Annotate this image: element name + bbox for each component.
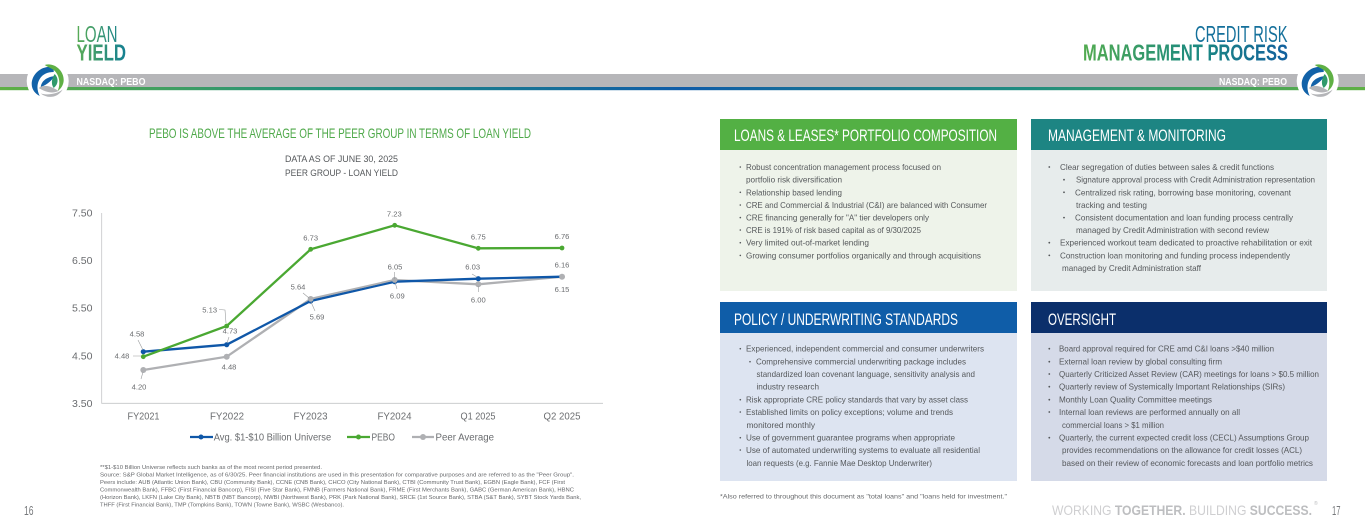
panel heading: OVERSIGHT — [1048, 310, 1116, 329]
footnote: sources and peers: Commonwealth Bank), FFBC (First Financial Bancorp), FISI (Five Star Bank), FMNB (Farmers National Bank), FRME (First Merchants Bank), GABC (German American Bank), HBNC — [100, 488, 574, 494]
data labels: 5.13 — [202, 306, 217, 315]
panel heading: POLICY / UNDERWRITING STANDARDS — [734, 310, 958, 329]
icon: logo right — [1297, 60, 1339, 102]
x axis labels: Q2 2025 — [544, 410, 581, 422]
title: loan yield — [76, 21, 126, 66]
panel heading — [1031, 119, 1327, 150]
chart subheading — [285, 154, 398, 178]
bullet list: Experienced, independent commercial and consumer underwriters — [746, 345, 984, 354]
legend: Avg. $1-$10 Billion Universe — [214, 433, 332, 444]
data labels: 7.23 — [387, 209, 402, 218]
title: loan yield: LOAN — [76, 21, 118, 47]
bullet list: provides recommendations on the allowance for credit losses (ACL) — [1062, 446, 1302, 455]
x axis labels: FY2022 — [210, 410, 244, 422]
data labels — [115, 209, 569, 392]
panel heading — [720, 302, 1017, 333]
footnote: sources and peers: (Horizon Bank), LKFN (Lake City Bank), NBTB (NBT Bancorp), NWBI (Northwest Bank), PRK (Park National Bank), SRCE (1st Source Bank), STBA (S&T Bank), SYBT Stock Yards Bank, — [100, 495, 581, 501]
legend: Peer Average — [436, 433, 494, 444]
bullet list: CRE is 191% of risk based capital as of 9/30/2025 — [746, 226, 921, 235]
bullet list: Board approval required for CRE amd C&I loans >$40 million — [1059, 345, 1274, 354]
bullet list: Construction loan monitoring and funding process independently — [1060, 251, 1291, 260]
bullet list: Growing consumer portfolios organically and through acquisitions — [746, 251, 981, 260]
registered mark: ® — [1314, 500, 1318, 507]
bullet list — [1048, 163, 1315, 273]
series: peer average — [140, 274, 565, 373]
x axis labels: Q1 2025 — [460, 410, 496, 422]
panel: policy and underwriting standards — [720, 302, 1017, 481]
bullet list: loan requests (e.g. Fannie Mae Desktop Underwriter) — [746, 459, 932, 468]
bullet list: Clear segregation of duties between sales & credit functions — [1060, 163, 1274, 172]
bullet list: commercial loans > $1 million — [1062, 421, 1164, 430]
bullet list — [1048, 345, 1319, 468]
bullet list — [740, 163, 987, 260]
bullet list: managed by Credit Administration with second review — [1076, 226, 1269, 235]
data labels: 4.20 — [132, 383, 146, 392]
data labels: 6.73 — [303, 233, 318, 242]
data labels: 6.75 — [471, 232, 486, 241]
chart subheading: PEER GROUP - LOAN YIELD — [285, 168, 398, 178]
panel heading — [720, 119, 1017, 150]
data labels: 6.09 — [390, 292, 405, 301]
x axis labels: FY2024 — [378, 410, 412, 422]
title: credit risk management process — [1083, 21, 1288, 66]
bullet list: Consistent documentation and loan funding process centrally — [1075, 214, 1294, 223]
title: credit risk management process: CREDIT RISK — [1195, 21, 1288, 47]
ticker label left: NASDAQ: PEBO — [76, 76, 146, 88]
panel heading: LOANS & LEASES* PORTFOLIO COMPOSITION — [734, 126, 997, 145]
header band — [0, 74, 1365, 90]
ticker label right: NASDAQ: PEBO — [1219, 76, 1287, 88]
bullet list: managed by Credit Administration staff — [1062, 264, 1202, 273]
bullet list: Centralized risk rating, borrowing base monitoring, covenant — [1075, 188, 1292, 197]
y axis labels: 4.50 — [72, 350, 93, 362]
bullet list: based on their review of economic forecasts and loan portfolio metrics — [1062, 459, 1313, 468]
legend: PEBO — [372, 433, 395, 444]
panel: oversight — [1031, 302, 1327, 481]
bullet list: Relationship based lending — [746, 188, 842, 197]
footnote: total loans: *Also referred to throughout this document as "total loans" and "loans held for investment." — [720, 494, 1007, 500]
bullet list: Internal loan reviews are performed annually on all — [1059, 408, 1240, 417]
series: avg $1-$10 billion universe — [141, 276, 562, 354]
bullet list: monitored monthly — [746, 421, 816, 430]
y axis labels: 6.50 — [72, 255, 93, 267]
x axis labels: FY2023 — [294, 410, 328, 422]
bullet list: Very limited out-of-market lending — [746, 239, 869, 248]
icon: logo left — [27, 60, 69, 102]
bullet list: portfolio risk diversification — [746, 176, 842, 185]
bullet list: CRE financing generally for "A" tier developers only — [746, 214, 930, 223]
data labels: 6.00 — [471, 295, 486, 304]
footnote: sources and peers: Source: S&P Global Market Intelligence, as of 6/30/25. Peer financial institutions are used in this presentation for comparative purposes and are referred to as the "Peer Group". — [100, 472, 574, 478]
leader lines — [133, 272, 478, 379]
y axis labels: 3.50 — [72, 398, 93, 410]
bullet list: Quarterly, the current expected credit loss (CECL) Assumptions Group — [1059, 434, 1309, 443]
bullet list: Signature approval process with Credit Administration representation — [1076, 176, 1315, 185]
bullet list: Use of government guarantee programs when appropriate — [746, 434, 955, 443]
bullet list: Comprehensive commercial underwriting package includes — [756, 358, 966, 367]
data labels: 6.03 — [465, 263, 480, 272]
data labels: 4.58 — [130, 330, 144, 339]
tagline: WORKING TOGETHER. BUILDING SUCCESS. — [1052, 502, 1312, 518]
bullet list: Quarterly review of Systemically Important Relationships (SIRs) — [1059, 383, 1285, 392]
bullet list: industry research — [756, 383, 819, 392]
x axis labels: FY2021 — [128, 410, 160, 422]
bullet list: CRE and Commercial & Industrial (C&I) are balanced with Consumer — [746, 201, 987, 210]
data labels: 6.15 — [555, 285, 569, 294]
bullet list: Quarterly Criticized Asset Review (CAR) meetings for loans > $0.5 million — [1059, 370, 1319, 379]
data labels: 4.48 — [115, 352, 129, 361]
bullet list: standardized loan covenant language, sensitivity analysis and — [756, 370, 975, 379]
line chart: loan yield — [72, 208, 603, 444]
y axis labels — [72, 208, 93, 410]
bullet list: Use of automated underwriting systems to evaluate all residential — [746, 446, 980, 455]
page number 17: 17 — [1332, 504, 1341, 518]
data labels: 4.48 — [222, 362, 236, 371]
panel: management and monitoring — [1031, 119, 1327, 291]
data labels: 6.76 — [555, 232, 569, 241]
title: loan yield: YIELD — [76, 40, 126, 66]
bullet list: Risk appropriate CRE policy standards that vary by asset class — [746, 396, 968, 405]
y axis labels: 7.50 — [72, 208, 93, 220]
footnote: sources and peers — [100, 465, 581, 508]
data labels: 5.64 — [291, 283, 305, 292]
bullet list — [740, 345, 984, 468]
footnote: sources and peers: Peers include: AUB (Atlantic Union Bank), CBU (Community Bank), CCNE (CNB Bank), CHCO (City National Bank), CTBI (Community Trust Bank), EGBN (Eagle Bank), FCF (First — [100, 480, 565, 486]
footnote: sources and peers: **$1-$10 Billion Universe reflects such banks as of the most recent period presented. — [100, 465, 322, 471]
bullet list: Monthly Loan Quality Committee meetings — [1059, 396, 1212, 405]
bullet list: tracking and testing — [1076, 201, 1147, 210]
data labels: 6.05 — [388, 263, 402, 272]
panel heading — [1031, 302, 1327, 333]
bullet list: Experienced workout team dedicated to proactive rehabilitation or exit — [1060, 239, 1313, 248]
x axis labels — [128, 410, 581, 422]
series: peer average overlap — [308, 274, 565, 302]
data labels: 6.16 — [555, 261, 569, 270]
chart subheading: DATA AS OF JUNE 30, 2025 — [285, 154, 398, 164]
panel heading: MANAGEMENT & MONITORING — [1048, 126, 1226, 145]
data labels: 5.69 — [310, 313, 324, 322]
chart heading: PEBO IS ABOVE THE AVERAGE OF THE PEER GROUP IN TERMS OF LOAN YIELD — [149, 125, 531, 141]
panel: loans and leases portfolio composition — [720, 119, 1017, 291]
bullet list: Robust concentration management process focused on — [746, 163, 941, 172]
footnote: sources and peers: THFF (First Financial Bank), TMP (Tompkins Bank), TOWN (Towne Bank), WSBC (Wesbanco). — [100, 502, 344, 508]
page number 16: 16 — [24, 504, 34, 518]
data labels: 4.73 — [223, 327, 237, 336]
bullet list: External loan review by global consulting firm — [1059, 358, 1222, 367]
y axis labels: 5.50 — [72, 302, 93, 314]
bullet list: Established limits on policy exceptions; volume and trends — [746, 408, 953, 417]
legend — [190, 433, 494, 444]
series: pebo — [141, 223, 564, 359]
